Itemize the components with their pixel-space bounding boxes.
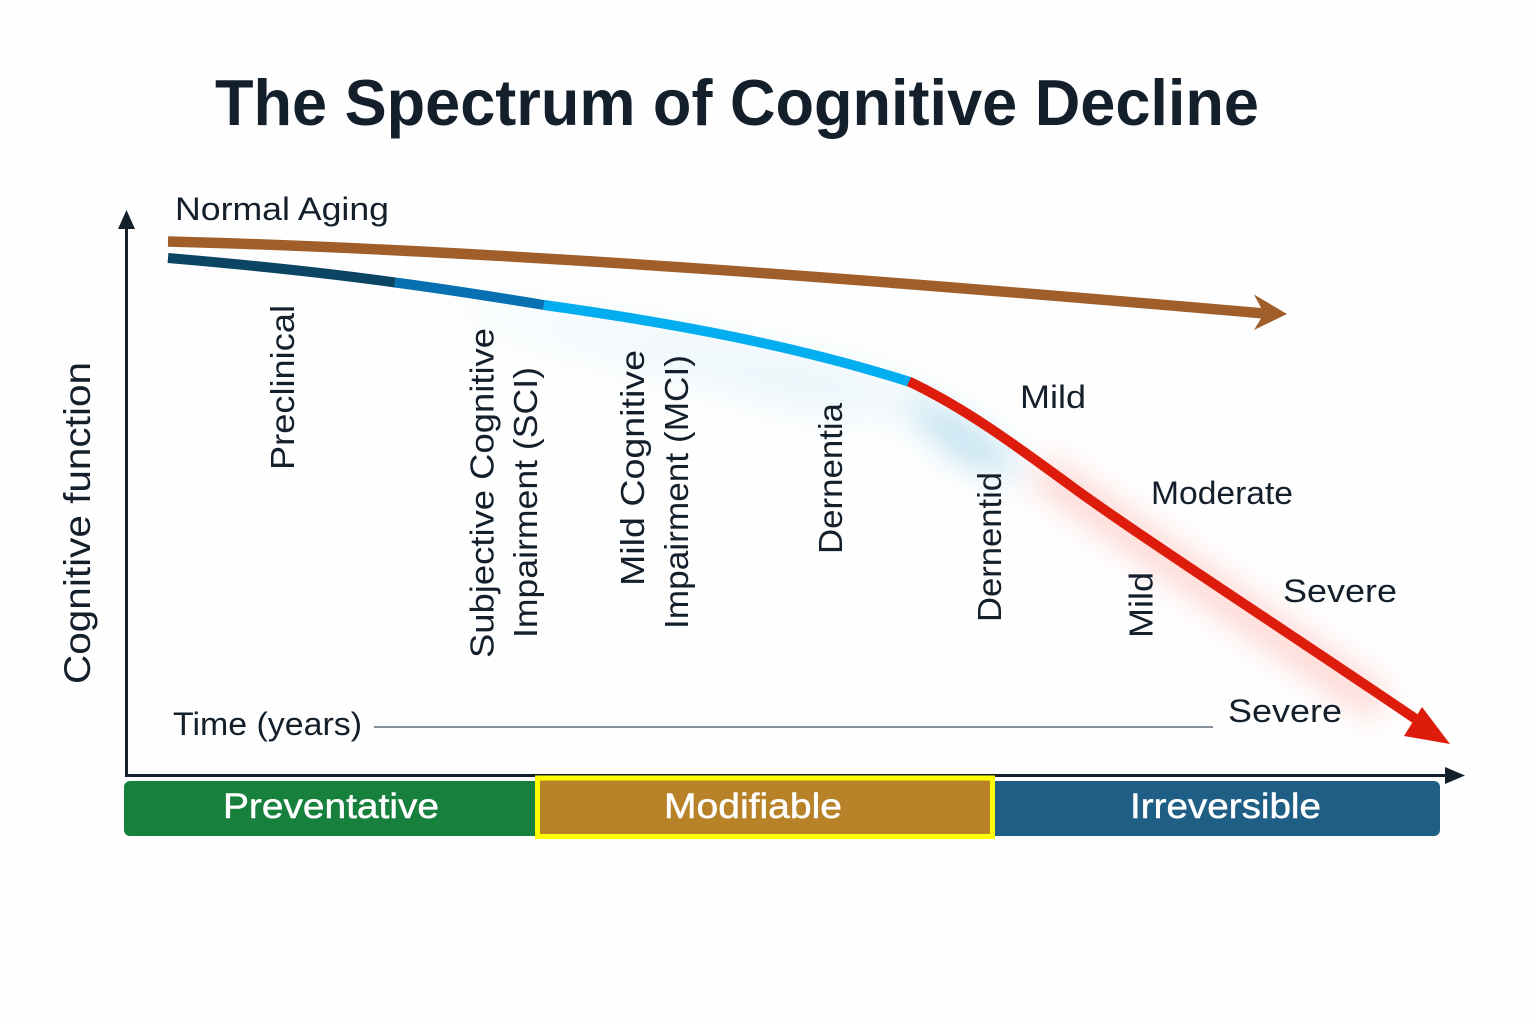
band: Preventative bbox=[124, 781, 540, 836]
red glow along curve bbox=[1040, 470, 1380, 705]
decline curve: MCI segment bbox=[544, 305, 910, 382]
label: Severe lower: Severe bbox=[1228, 693, 1342, 729]
chart: cognitive decline curves bbox=[118, 210, 1465, 784]
label: Normal Aging: Normal Aging bbox=[175, 191, 389, 227]
time axis label: Time (years) bbox=[173, 706, 362, 742]
blue glow near inflection bbox=[900, 392, 1025, 472]
decline curve: SCI segment bbox=[395, 282, 544, 305]
x axis bbox=[125, 767, 1465, 784]
y axis bbox=[118, 210, 135, 775]
title: The Spectrum of Cognitive Decline bbox=[215, 66, 1259, 139]
y axis label: Cognitive function bbox=[57, 362, 98, 684]
label: Moderate: Moderate bbox=[1151, 475, 1293, 511]
label: Preclinical: Preclinical bbox=[264, 305, 301, 470]
band: Irreversible bbox=[990, 781, 1440, 836]
label: Mild Cognitive Impairment (MCI): Mild Cognitive bbox=[614, 350, 651, 586]
decline curve: preclinical segment bbox=[168, 258, 395, 282]
label: Subjective Cognitive Impairment (SCI) bbox=[464, 328, 544, 658]
label: Mild Cognitive Impairment (MCI) bbox=[614, 350, 695, 629]
label: Mild Cognitive Impairment (MCI): Impairment (MCI) bbox=[658, 355, 695, 629]
decline curve: dementia arrow bbox=[909, 382, 1450, 744]
label: Subjective Cognitive Impairment (SCI): Impairment (SCI) bbox=[507, 367, 544, 638]
normal aging arrow bbox=[168, 242, 1287, 330]
label: Dernentid: Dernentid bbox=[971, 472, 1008, 622]
band: Preventative: Preventative bbox=[223, 787, 439, 826]
blue glow under curve bbox=[420, 296, 910, 405]
label: Subjective Cognitive Impairment (SCI): Subjective Cognitive bbox=[464, 328, 500, 658]
band: Irreversible: Irreversible bbox=[1130, 787, 1321, 826]
band: Modifiable: Modifiable bbox=[664, 787, 842, 826]
label: Severe upper: Severe bbox=[1283, 573, 1397, 609]
label: Mild vertical: Mild bbox=[1122, 572, 1160, 638]
label: Dernentia: Dernentia bbox=[812, 402, 849, 554]
band: Modifiable bbox=[538, 778, 992, 836]
label: Mild: Mild bbox=[1020, 379, 1086, 415]
